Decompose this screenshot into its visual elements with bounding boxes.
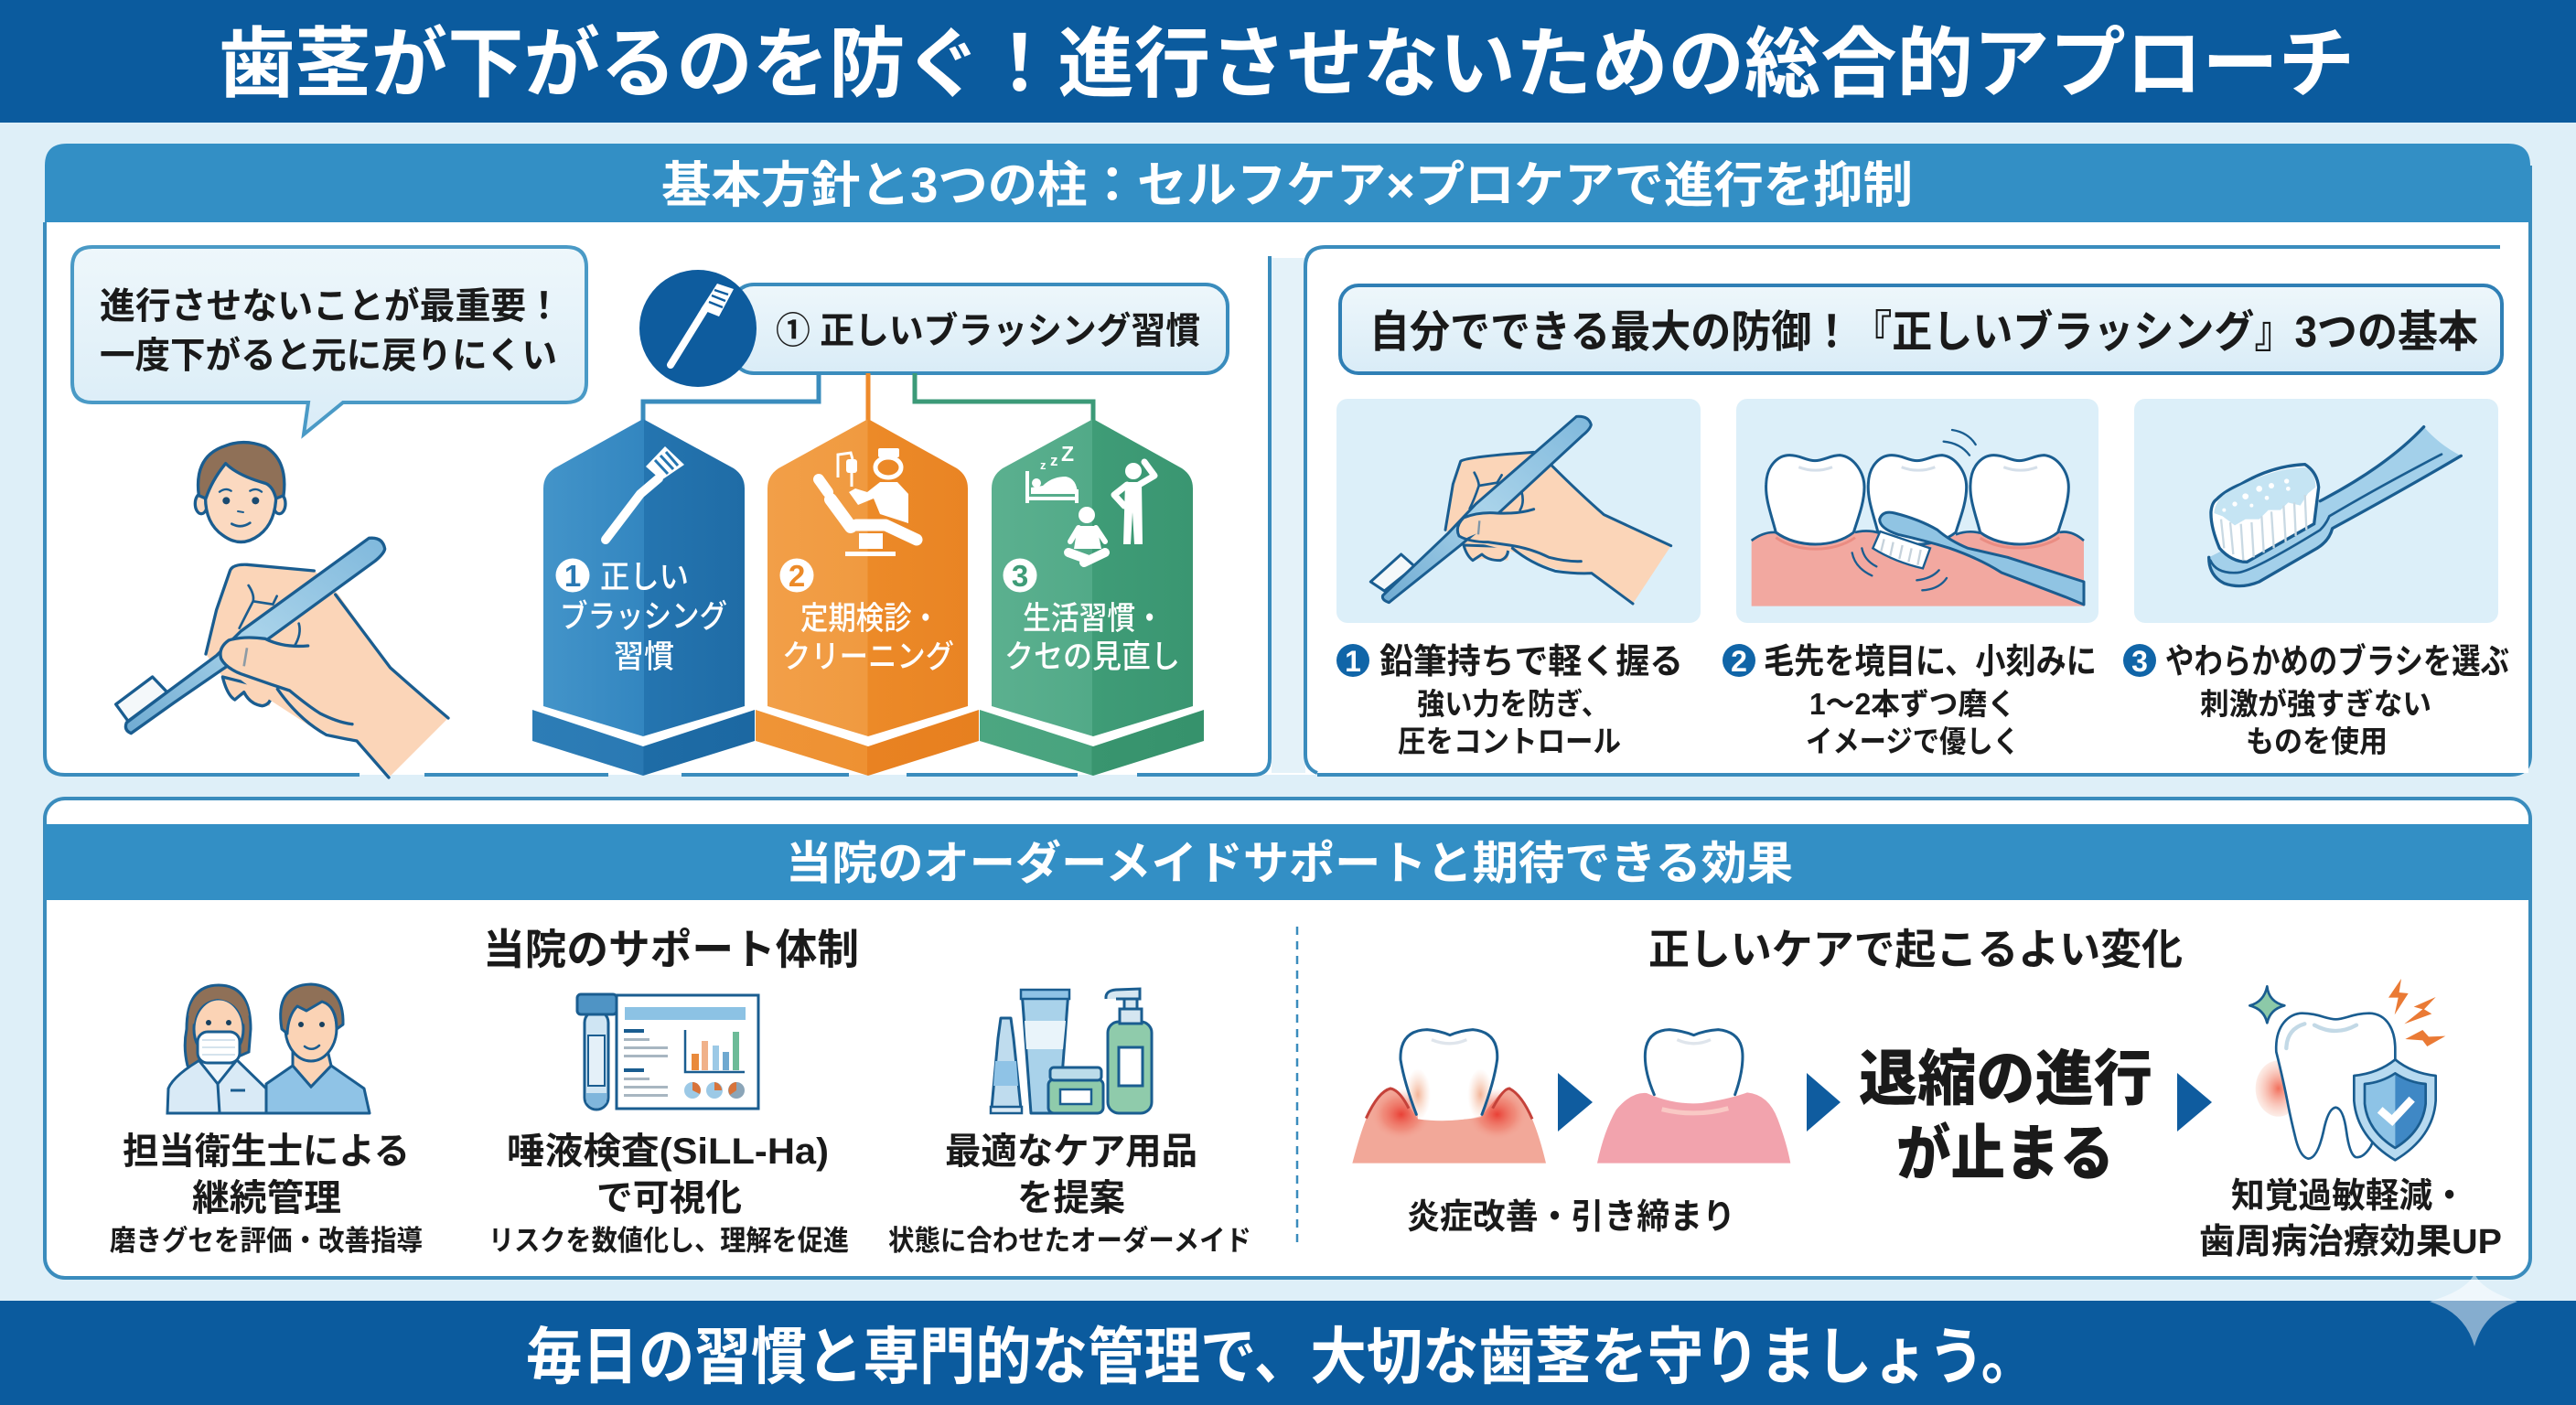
icon: sparkle: [2430, 1273, 2517, 1346]
caption: inflammation improves: 炎症改善・引き締まり: [1407, 1198, 1735, 1237]
section header bar: 当院のオーダーメイドサポートと期待できる効果: [786, 838, 1793, 889]
icon: toothbrush: [606, 446, 684, 540]
pillar 2: checkups: [756, 419, 979, 776]
step 3 caption: 刺激が強すぎない: [2200, 687, 2431, 721]
icon: protected tooth: [2249, 979, 2445, 1160]
speech bubble: [72, 247, 586, 434]
support item 3 text: [888, 1132, 1251, 1257]
illustration: healthy gum: [1597, 1030, 1790, 1164]
arrow: [2177, 1073, 2212, 1132]
pillar 1 label: 習慣: [614, 639, 674, 675]
step 2 caption: [1723, 643, 2097, 758]
title: 歯茎が下がるのを防ぐ！進行させないための総合的アプローチ: [219, 21, 2355, 107]
support item 1 text: 継続管理: [192, 1178, 341, 1218]
step 1 caption: 鉛筆持ちで軽く握る: [1379, 643, 1683, 681]
section header bar: [45, 144, 2530, 222]
icon: toothbrush in circle: [639, 270, 757, 387]
step 2 caption: 毛先を境目に、小刻みに: [1764, 643, 2097, 681]
section header bar: [45, 824, 2530, 900]
speech bubble: 一度下がると元に戻りにくい: [100, 336, 557, 376]
icon: dental chair: [819, 448, 917, 556]
illustration: inflamed gum: [1352, 1030, 1546, 1164]
heading: support system: 当院のサポート体制: [483, 926, 859, 973]
speech bubble: 進行させないことが最重要！: [100, 286, 562, 327]
support item 2 text: で可視化: [596, 1178, 742, 1218]
support item 2 text: 唾液検査(SiLL-Ha): [507, 1132, 829, 1172]
step 1 caption: 圧をコントロール: [1398, 724, 1621, 758]
icon: care products: [991, 989, 1152, 1113]
icon: sleep and stress: Z: [1061, 442, 1074, 466]
arrow: [1807, 1073, 1841, 1132]
illustration: person's face: [195, 443, 285, 542]
icon: sleep and stress: z: [1050, 452, 1057, 469]
pillar 1 label: [556, 558, 727, 675]
pillar 2 label: クリーニング: [782, 639, 954, 675]
header banner: [0, 0, 2576, 123]
step 3 caption: [2123, 642, 2509, 758]
support item 2 text: リスクを数値化し、理解を促進: [488, 1225, 849, 1257]
arrow: [1558, 1073, 1593, 1132]
step 1 caption: 1: [1345, 645, 1361, 678]
caption: sensitivity relief: 歯周病治療効果UP: [2199, 1223, 2502, 1261]
tile 1: pencil grip: [1336, 399, 1701, 623]
footer banner: [0, 1301, 2576, 1405]
step 1 caption: 強い力を防ぎ、: [1417, 687, 1609, 721]
pillar 1 label: 正しい: [600, 560, 689, 595]
pillar 1 label: ブラッシング: [560, 599, 727, 635]
support item 1 text: [110, 1132, 423, 1257]
heading box: 自分でできる最大の防御！『正しいブラッシング』3つの基本: [1369, 308, 2478, 357]
icon: sleep and stress: [1027, 442, 1154, 563]
pillar 3 label: 生活習慣・: [1023, 601, 1164, 637]
icon: hygienist and patient: [167, 984, 370, 1113]
pillar 1: brushing: [532, 419, 755, 776]
pillar 2 label: [779, 558, 954, 675]
caption: sensitivity relief: 知覚過敏軽減・: [2231, 1177, 2466, 1216]
pillar 3 label: 3: [1012, 559, 1028, 593]
panel: three brushing basics: [1305, 247, 2528, 775]
step 1 caption: [1336, 643, 1683, 758]
heading: good changes: 正しいケアで起こるよい変化: [1648, 926, 2183, 973]
section header bar: 基本方針と3つの柱：セルフケア×プロケアで進行を抑制: [661, 158, 1913, 213]
step 3 caption: やわらかめのブラシを選ぶ: [2165, 642, 2509, 681]
step 2 caption: イメージで優しく: [1806, 724, 2020, 758]
pillar 2 label: 定期検診・: [800, 601, 939, 637]
step 2 caption: 1〜2本ずつ磨く: [1809, 687, 2016, 721]
panel: support and effects: [45, 799, 2530, 1278]
icon: sleep and stress: z: [1040, 458, 1046, 472]
caption: sensitivity relief: [2199, 1177, 2502, 1261]
support item 3 text: 状態に合わせたオーダーメイド: [888, 1225, 1251, 1257]
connector lines: [643, 373, 1093, 423]
callout: recession stops: [1859, 1045, 2152, 1187]
callout: recession stops: 退縮の進行: [1859, 1045, 2152, 1112]
tile 2: brushing at gum line: [1736, 399, 2098, 623]
pillar 3 label: クセの見直し: [1004, 639, 1180, 675]
step 2 caption: 2: [1731, 645, 1747, 678]
support item 1 text: 担当衛生士による: [123, 1132, 410, 1172]
support item 2 text: [488, 1132, 849, 1257]
support item 3 text: を提案: [1017, 1178, 1125, 1218]
support item 1 text: 磨きグセを評価・改善指導: [110, 1225, 423, 1257]
pillar 2 label: 2: [789, 559, 805, 593]
panel: basic policy and three pillars: [45, 144, 2530, 778]
footer message: 毎日の習慣と専門的な管理で、大切な歯茎を守りましょう。: [526, 1323, 2037, 1392]
pillar header: brushing habit: ① 正しいブラッシング習慣: [776, 311, 1200, 351]
icon: saliva test and report: [577, 994, 758, 1110]
pillar 1 label: 1: [564, 559, 581, 593]
support item 3 text: 最適なケア用品: [945, 1132, 1197, 1172]
step 3 caption: 3: [2131, 645, 2148, 678]
step 3 caption: ものを使用: [2246, 724, 2388, 758]
illustration: hand holding toothbrush: [116, 538, 448, 778]
callout: recession stops: が止まる: [1896, 1120, 2114, 1187]
pillar 3: lifestyle: [980, 419, 1204, 776]
pillar header: brushing habit: [639, 270, 1228, 387]
pillar 3 label: [1003, 558, 1180, 675]
heading box: [1340, 285, 2502, 373]
tile 3: soft brush: [2134, 399, 2498, 623]
